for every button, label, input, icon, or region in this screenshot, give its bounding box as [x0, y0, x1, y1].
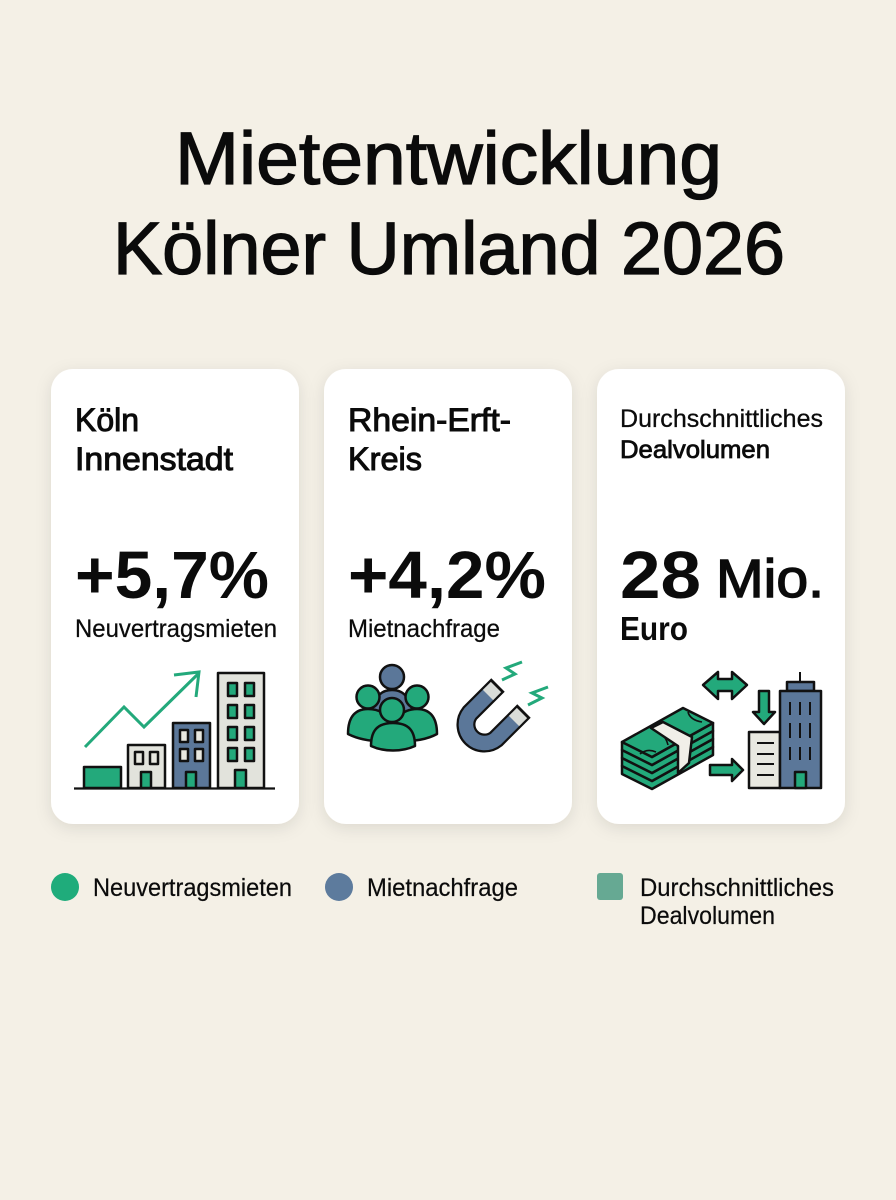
title: Kölner Umland 2026 — [113, 207, 785, 290]
value: +5,7% — [75, 538, 269, 613]
icon: stack of banknotes — [622, 708, 713, 789]
card background — [324, 369, 572, 824]
card background — [597, 369, 845, 824]
heading — [348, 402, 511, 477]
heading: Köln — [75, 402, 139, 438]
panel: Köln Innenstadt — [51, 369, 299, 824]
legend — [51, 873, 834, 930]
panel: Durchschnittliches Dealvolumen — [597, 369, 845, 824]
legend item: Mietnachfrage: Mietnachfrage — [367, 874, 518, 902]
legend item: Durchschnittliches Dealvolumen: Durchschnittliches — [640, 874, 834, 902]
legend item: Neuvertragsmieten: Neuvertragsmieten — [93, 874, 292, 902]
icon: magnet — [466, 662, 548, 743]
heading: Kreis — [348, 441, 422, 477]
icon: group of people — [348, 665, 437, 750]
heading — [620, 405, 823, 464]
value: Mio. — [716, 549, 824, 609]
icon: double arrow — [703, 672, 747, 699]
heading: Dealvolumen — [620, 436, 770, 464]
value: +4,2% — [348, 538, 546, 613]
title: Mietentwicklung — [175, 117, 722, 200]
heading: Durchschnittliches — [620, 405, 823, 433]
icon: right arrow — [710, 759, 743, 781]
metric label: Euro — [620, 610, 688, 647]
heading: Rhein-Erft- — [348, 402, 511, 438]
metric label: Mietnachfrage — [348, 615, 500, 643]
icon: rising arrow over buildings — [74, 672, 275, 788]
legend item: Durchschnittliches Dealvolumen: Dealvolumen — [640, 902, 775, 930]
heading — [75, 402, 233, 477]
panel: Rhein-Erft-Kreis — [324, 369, 572, 824]
value — [620, 538, 824, 613]
icon: office buildings — [749, 672, 821, 788]
legend item: Durchschnittliches Dealvolumen — [597, 873, 834, 930]
card background — [51, 369, 299, 824]
value: 28 — [620, 538, 701, 613]
metric label: Neuvertragsmieten — [75, 615, 277, 643]
title — [113, 117, 785, 290]
heading: Innenstadt — [75, 441, 233, 477]
icon: down arrow — [753, 691, 775, 724]
